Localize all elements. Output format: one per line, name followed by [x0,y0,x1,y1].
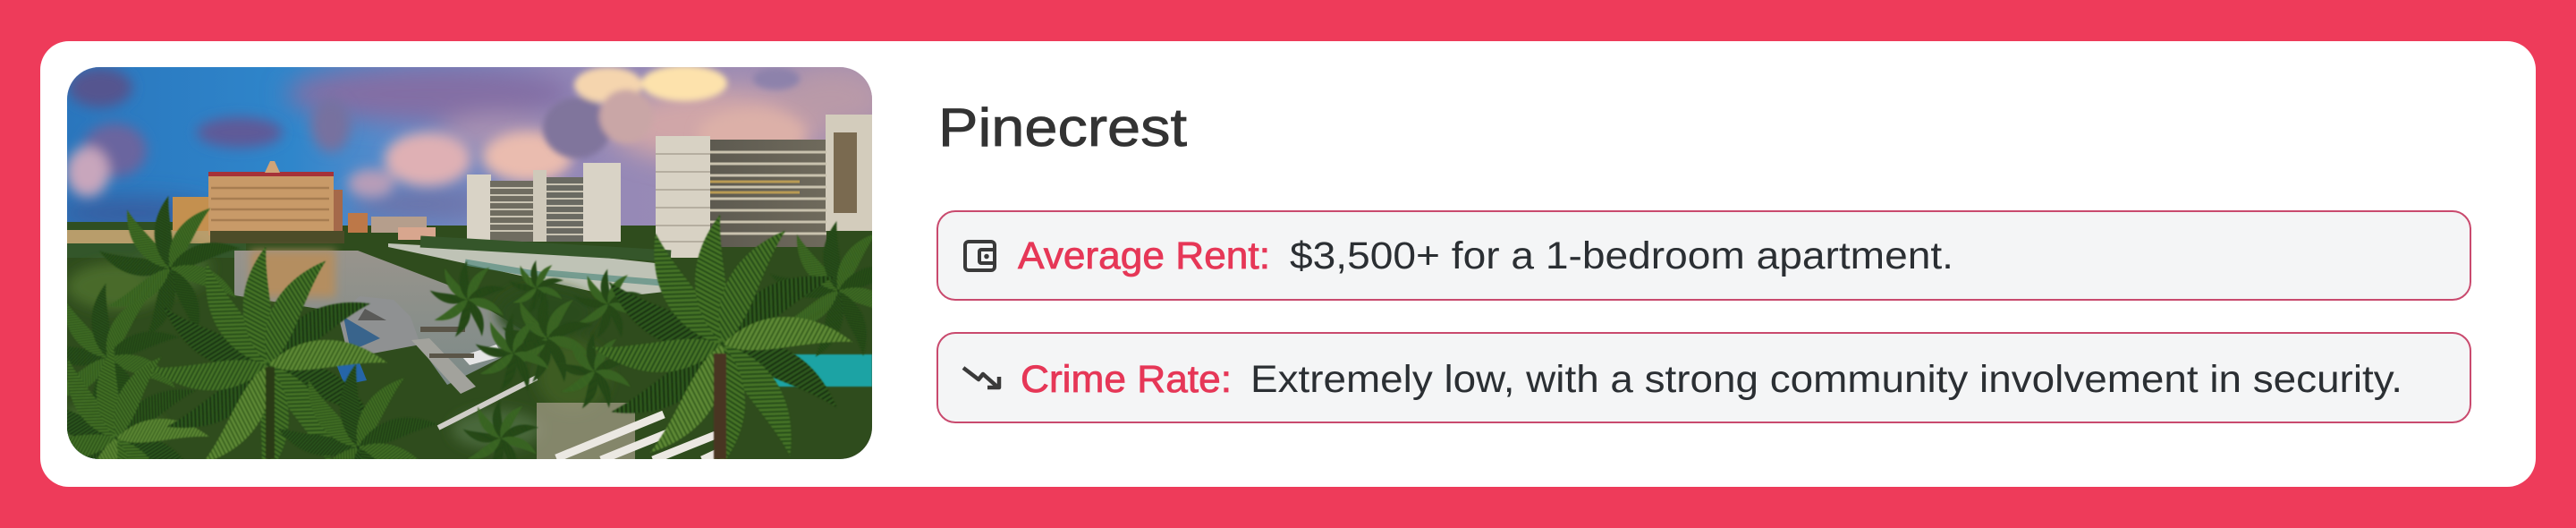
marina dock and roofs [336,309,501,394]
label: Average Rent: Average Rent: [1018,234,1270,277]
palm trees [67,195,872,459]
value: rent: $3,500+ for a 1-bedroom apartment. [1290,234,1953,277]
white railings and terrace [438,378,729,460]
buildings: centre white tower [467,163,621,243]
buildings: red-roofed hotel group [173,161,436,243]
soft foliage light and shade [54,245,608,456]
icon: trending down arrow [963,368,999,387]
heading: Pinecrest: Pinecrest [938,98,1187,158]
ground and horizon [67,226,872,459]
value: crime: Extremely low, with a strong community involvement in security. [1250,358,2402,401]
icon: wallet [965,242,995,270]
clouds [54,65,886,226]
row: average rent [937,211,2470,300]
waterfront townhouses [388,242,673,297]
canal water [234,251,528,385]
label: Crime Rate: Crime Rate: [1021,358,1232,401]
row: crime rate [937,333,2470,422]
turquoise pool [773,353,872,387]
photo: Sarasota-style waterfront skyline with palms [67,67,872,459]
buildings: right white tower [656,115,872,258]
